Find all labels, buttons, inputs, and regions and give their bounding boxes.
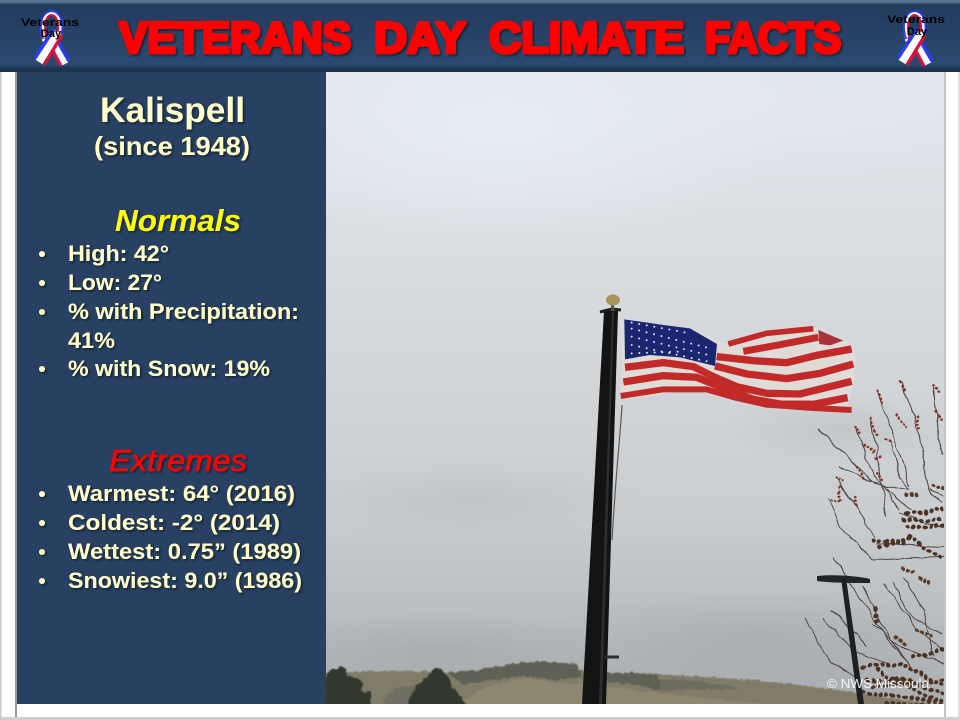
sky: [326, 72, 944, 704]
flagpole: [582, 294, 622, 704]
heading: station name: (since 1948): [94, 131, 250, 161]
dense lower leaves: [863, 510, 947, 707]
heading: Extremes: Extremes: [109, 443, 247, 478]
normals list: 41%: [68, 328, 115, 353]
icon: left ribbon: Veterans: [21, 17, 79, 29]
extremes list: Wettest: 0.75” (1989): [68, 539, 301, 564]
street light: [817, 575, 870, 704]
header banner: [0, 0, 960, 72]
bare tree with autumn leaves: [805, 383, 947, 707]
heading: station name: [94, 91, 250, 161]
heading: station name: Kalispell: [100, 91, 245, 130]
photo credit: © NWS Missoula: [827, 676, 930, 691]
extremes list: Warmest: 64° (2016): [68, 481, 295, 506]
icon: left ribbon: Day: [41, 28, 62, 40]
blue canton with stars: [624, 319, 717, 366]
normals list: % with Precipitation:: [68, 299, 299, 324]
icon: left ribbon: [21, 11, 79, 66]
flag fold: [818, 330, 843, 345]
evergreen trees: [323, 667, 465, 707]
panel: Kalispell climate facts: [17, 72, 326, 704]
branches: [805, 383, 947, 677]
icon: right ribbon: Veterans: [887, 14, 945, 26]
hills with tree line: [323, 661, 947, 707]
extremes list: Snowiest: 9.0” (1986): [68, 568, 302, 593]
normals list: [39, 241, 299, 381]
heading: Normals: Normals: [115, 203, 241, 238]
icon: right ribbon: Day: [907, 26, 928, 38]
icon: right ribbon: [887, 11, 945, 66]
american flag: [620, 318, 855, 411]
extremes list: Coldest: -2° (2014): [68, 510, 280, 535]
title: VETERANS: [119, 14, 351, 62]
title: [119, 14, 841, 62]
title: FACTS: [705, 14, 841, 62]
photo: flag on pole against overcast sky: [326, 72, 944, 704]
red stripes: [621, 329, 853, 410]
red seed clusters: [832, 383, 942, 507]
normals list: % with Snow: 19%: [68, 356, 270, 381]
title: DAY: [374, 14, 466, 62]
normals list: Low: 27°: [68, 270, 162, 295]
normals list: High: 42°: [68, 241, 169, 266]
title: CLIMATE: [489, 14, 684, 62]
extremes list: [39, 481, 302, 593]
flag field: [620, 318, 855, 411]
